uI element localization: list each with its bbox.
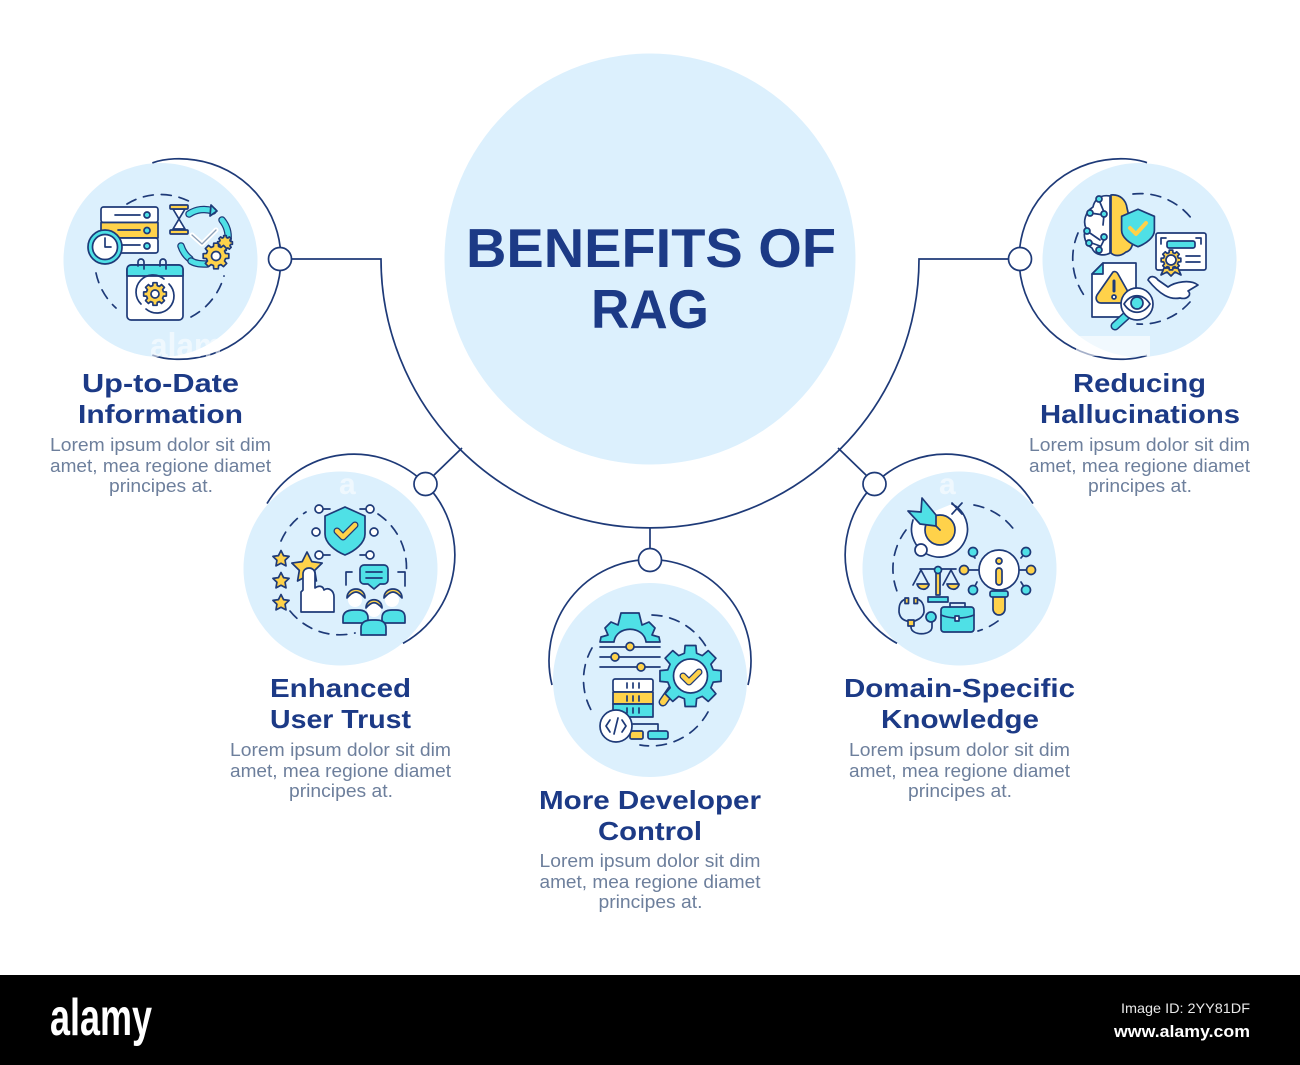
watermark fragment [1076,336,1150,356]
panel: up-to-date information [64,159,292,365]
watermark fragment: a [339,468,356,501]
connector arc [291,259,1008,548]
text: more developer control: Control [598,816,702,846]
text: enhanced user trust: Enhanced [270,673,411,703]
text: up-to-date information: Information [78,399,243,429]
title: BENEFITS OF [466,217,836,279]
text: domain-specific knowledge: Lorem ipsum dolor sit dim [849,740,1070,760]
outline arc and node [153,159,292,359]
text: up-to-date information: principes at. [109,476,213,496]
panel: enhanced user trust [244,454,455,666]
icon: brain, shield, certificate, warning document [1073,194,1206,326]
outline arc and node [549,548,751,685]
text: reducing hallucinations: Hallucinations [1040,399,1240,429]
outline arc and node [267,454,455,643]
text: domain-specific knowledge: Domain-Specific [844,673,1075,703]
text: reducing hallucinations: Reducing [1073,368,1206,398]
text: more developer control: Lorem ipsum dolor sit dim [540,851,760,871]
outline arc and node [1008,159,1147,359]
text: up-to-date information: Lorem ipsum dolor sit dim [50,435,271,455]
text: up-to-date information [50,368,271,496]
title [466,217,836,340]
footer logo: alamy [50,989,152,1047]
icon: shield, stars, users [273,505,406,635]
footer bar [0,975,1300,1065]
text: reducing hallucinations: amet, mea regione diamet [1029,456,1250,476]
text: domain-specific knowledge: principes at. [908,781,1012,801]
text: more developer control: amet, mea regione diamet [540,872,760,892]
watermark fragment: alam [150,327,222,365]
website: www.alamy.com [1113,1023,1250,1041]
text: domain-specific knowledge [844,673,1075,801]
badge circle [244,472,438,666]
icon: target, scales, info, stethoscope, briefcase [893,498,1036,634]
text: enhanced user trust: amet, mea regione diamet [230,761,451,781]
panel: reducing hallucinations [1008,159,1236,359]
badge circle [862,472,1056,666]
text: domain-specific knowledge: amet, mea regione diamet [849,761,1070,781]
text: more developer control: More Developer [539,785,761,815]
image id: Image ID: 2YY81DF [1121,1000,1250,1016]
text: up-to-date information: Up-to-Date [82,368,239,398]
text: enhanced user trust: Lorem ipsum dolor sit dim [230,740,451,760]
text: enhanced user trust: User Trust [270,704,411,734]
badge circle [1042,163,1236,357]
watermark fragment: a [939,468,956,501]
badge circle [553,583,747,777]
panel: more developer control [549,548,751,777]
text: up-to-date information: amet, mea regione diamet [50,456,271,476]
text: reducing hallucinations: Lorem ipsum dolor sit dim [1029,435,1250,455]
title: RAG [591,278,709,340]
text: more developer control [539,785,761,912]
central circle [444,54,856,464]
text: more developer control: principes at. [598,892,702,912]
outline arc and node [845,454,1033,643]
text: reducing hallucinations [1029,368,1250,496]
text: enhanced user trust [230,673,451,801]
text: reducing hallucinations: principes at. [1088,476,1192,496]
icon: gears, sliders, database, code [583,613,721,746]
text: domain-specific knowledge: Knowledge [881,704,1039,734]
icon: servers, clock, calendar [88,195,232,320]
text: enhanced user trust: principes at. [289,781,393,801]
panel: domain-specific knowledge [845,454,1056,666]
badge circle [64,163,258,357]
